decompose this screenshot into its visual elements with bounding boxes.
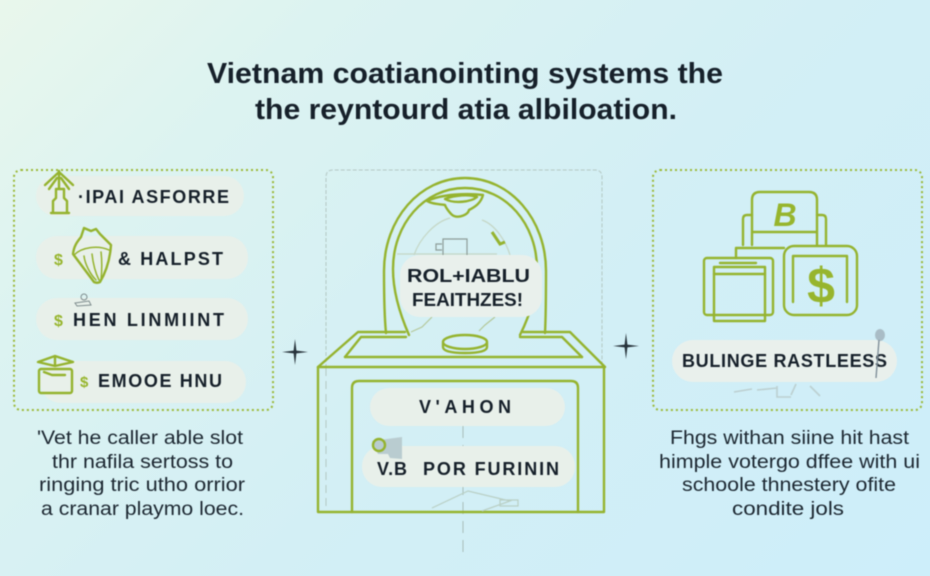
pill: bulinge rastleess [672,340,897,382]
sketch: faint note [734,384,820,397]
sketch: faint triangle [432,491,518,511]
text: right description: Fhgs withan siine hit hast [670,428,910,449]
panel: centre frame [326,170,602,556]
pill: row one [36,176,244,216]
text: left description: thr nafila sertoss to [52,452,233,473]
icon: left sparkle [282,339,308,365]
text: right description: himple votergo dffee with ui [659,452,920,473]
icon: tower [45,171,73,213]
label: features bubble: ROL+IABLU [407,266,530,286]
label: features bubble [400,255,542,317]
text: left description: 'Vet he caller able slot [37,428,244,449]
text: left description [37,428,246,520]
illustration: arch [384,178,546,335]
pill: por furinin: V.B [377,459,407,479]
pill: row three: HEN LINMIINT [73,310,224,330]
label: features bubble: FEAITHZES! [412,290,523,310]
title [207,58,723,126]
pill: vahon [370,388,565,426]
text: right description: condite jols [732,499,844,520]
icon: coin [443,335,487,353]
text: left description: ringing tric utho orrior [39,475,246,496]
title: Vietnam coatianointing systems the [207,58,723,90]
icon: box [38,356,73,393]
pill: row two: & HALPST [118,249,223,269]
pill: row three: $ [54,313,63,330]
pill: row three [36,298,248,340]
icon: document stack and dollar: B [773,197,797,233]
pill: row four [40,361,246,403]
pill: row four: EMOOE HNU [98,371,222,391]
text: right description [659,428,920,520]
icon: coin with note [372,437,402,459]
text: right description: schoole thnestery ofite [682,475,896,496]
pill: bulinge rastleess: BULINGE RASTLEESS [682,351,887,371]
pill: row two: $ [54,252,63,269]
icon: right sparkle [613,333,639,359]
panel: right card [653,170,922,410]
pill: row two [36,236,248,279]
panel: left list [14,170,273,410]
pill: por furinin: POR FURININ [423,459,559,479]
icon: pin [875,329,885,378]
icon: document stack and dollar [704,192,857,321]
text: left description: a cranar playmo loec. [41,499,244,520]
pill: por furinin [362,446,575,487]
illustration: pedestal [318,332,605,512]
pill: row four: $ [80,374,89,391]
sketch: inside arch [397,194,510,332]
icon: small sketch [75,294,91,306]
icon: shell [73,228,111,283]
title: the reyntourd atia albiloation. [255,94,677,126]
pill: vahon: V'AHON [419,397,511,417]
icon: document stack and dollar: $ [807,258,835,314]
pill: row one: ·IPAI ASFORRE [78,187,229,207]
